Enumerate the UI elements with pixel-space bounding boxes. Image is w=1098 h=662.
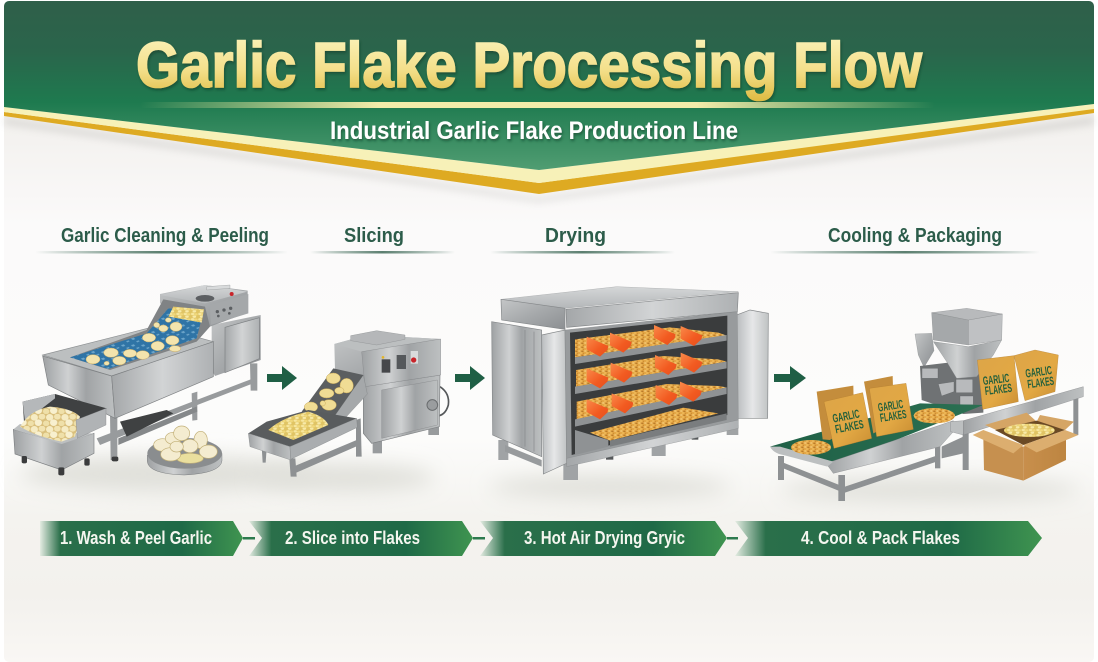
- tray side wall: [76, 408, 106, 438]
- bottom rail: [567, 420, 738, 467]
- slicing machine: [248, 331, 449, 477]
- red button: [230, 292, 234, 296]
- conveyor green belt: [770, 403, 983, 465]
- chute: [70, 299, 210, 370]
- right door: [737, 310, 768, 418]
- garlic on chute: [168, 307, 204, 323]
- title underline: [140, 102, 935, 108]
- subtitle: Industrial Garlic Flake Production Line: [330, 117, 738, 145]
- bag 2: [869, 383, 913, 437]
- hot air dryer: [492, 287, 768, 480]
- left side panel: [492, 322, 542, 457]
- garlic bulbs: [154, 426, 217, 463]
- shelf 3 flakes: [577, 384, 727, 419]
- bag back left: [817, 386, 854, 440]
- bag 2: FLAKES: [879, 407, 907, 425]
- header banner: [4, 1, 1094, 202]
- flakes on belt: [304, 373, 353, 412]
- side control box: [212, 315, 261, 376]
- back legs and frame: [97, 363, 257, 460]
- handle: [207, 285, 230, 290]
- cardboard box: [973, 413, 1078, 481]
- incline side: [328, 375, 367, 425]
- front fascia: [566, 293, 738, 327]
- bag 4: FLAKES: [1026, 374, 1055, 391]
- garlic bowl: [147, 426, 222, 475]
- open left door: [542, 330, 567, 474]
- top dial: [196, 295, 214, 302]
- hose: [435, 387, 449, 416]
- step ribbon 1: 1. Wash & Peel Garlic: [60, 528, 212, 548]
- lower brace: [505, 445, 542, 467]
- cream chevron band: [4, 104, 1094, 183]
- step ribbon 2: 2. Slice into Flakes: [285, 528, 420, 548]
- bag 2: GARLIC: [877, 397, 904, 415]
- feed tray: [23, 394, 107, 427]
- top face: [501, 287, 738, 308]
- cabinet interior: [570, 316, 727, 455]
- shelf 1: [575, 335, 727, 364]
- bag 1: [824, 393, 872, 448]
- conveyor frame and legs: [262, 418, 362, 477]
- bag 3: FLAKES: [984, 381, 1013, 398]
- hopper box: [932, 313, 968, 345]
- incline belt: [302, 368, 363, 425]
- feet: [373, 423, 439, 453]
- heat arrows row 1: [587, 325, 702, 357]
- lower cabinet: [363, 375, 440, 443]
- second conveyor end: [951, 421, 963, 435]
- arrow 2: [455, 366, 485, 390]
- bag 3: GARLIC: [982, 371, 1010, 388]
- flake pile left: [791, 440, 831, 455]
- shelf 3: [575, 387, 727, 427]
- floor reflections: [20, 456, 1080, 502]
- shelf 1 flakes: [575, 327, 727, 357]
- top plate: [351, 331, 405, 345]
- packaging line: [770, 308, 1083, 501]
- tray heap: [20, 407, 80, 442]
- flake pile middle: [914, 408, 955, 423]
- cabinet frame: [565, 312, 738, 465]
- bag 3: [977, 356, 1018, 409]
- arrow 1: [267, 366, 297, 390]
- bag 1: GARLIC: [831, 407, 861, 426]
- first conveyor legs: [778, 445, 940, 501]
- left fascia: [501, 299, 565, 329]
- section heading: cooling and packaging: Cooling & Packaging: [828, 225, 1002, 247]
- round fitting: [427, 400, 438, 410]
- bag 4: [1014, 350, 1058, 401]
- conveyor rail: [826, 421, 953, 473]
- control buttons: [216, 307, 232, 317]
- second conveyor rail: [963, 387, 1083, 435]
- title: Garlic Flake Processing Flow: [136, 29, 922, 101]
- heat arrows row 3: [587, 382, 702, 419]
- tray wheels: [22, 456, 118, 475]
- step ribbon 2: [249, 521, 485, 556]
- washing and peeling machine: [13, 285, 261, 475]
- filling machine block: [920, 362, 983, 414]
- second conveyor legs: [942, 398, 1078, 470]
- heat arrows row 2: [587, 353, 702, 388]
- control panels: [382, 359, 390, 373]
- tray box: [13, 429, 94, 470]
- gold chevron edge: [4, 108, 1094, 194]
- step ribbon 4: [735, 521, 1042, 556]
- shelf 2: [575, 362, 727, 394]
- hopper side chute: [915, 333, 934, 367]
- conveyor end roller: [770, 447, 833, 467]
- step ribbon 1: [40, 521, 255, 556]
- step ribbon 3: 3. Hot Air Drying Gryic: [524, 528, 685, 548]
- bag back middle: [864, 376, 894, 433]
- tank front face: [112, 342, 213, 418]
- feed tray: [248, 410, 357, 447]
- step ribbon 4: 4. Cool & Pack Flakes: [801, 528, 960, 548]
- arrow 3: [774, 366, 806, 390]
- legs: [498, 425, 738, 480]
- top unit: [160, 285, 248, 327]
- shelf 2 flakes: [576, 356, 727, 387]
- bag 1: FLAKES: [834, 417, 865, 436]
- bag 4: GARLIC: [1024, 363, 1053, 381]
- green banner shape: [4, 1, 1094, 170]
- garlic in water: [86, 318, 182, 365]
- bottom tray: [590, 408, 718, 441]
- section heading: drying: Drying: [545, 225, 606, 247]
- tank left face: [43, 356, 115, 418]
- water: [70, 308, 203, 369]
- tank rim: [43, 326, 213, 376]
- flakes heap: [268, 412, 328, 440]
- step ribbon 3: [480, 521, 738, 556]
- hopper funnel: [933, 340, 1002, 378]
- upper body: [334, 335, 441, 387]
- section heading: cleaning: Garlic Cleaning & Peeling: [61, 225, 269, 247]
- section heading: slicing: Slicing: [344, 225, 404, 247]
